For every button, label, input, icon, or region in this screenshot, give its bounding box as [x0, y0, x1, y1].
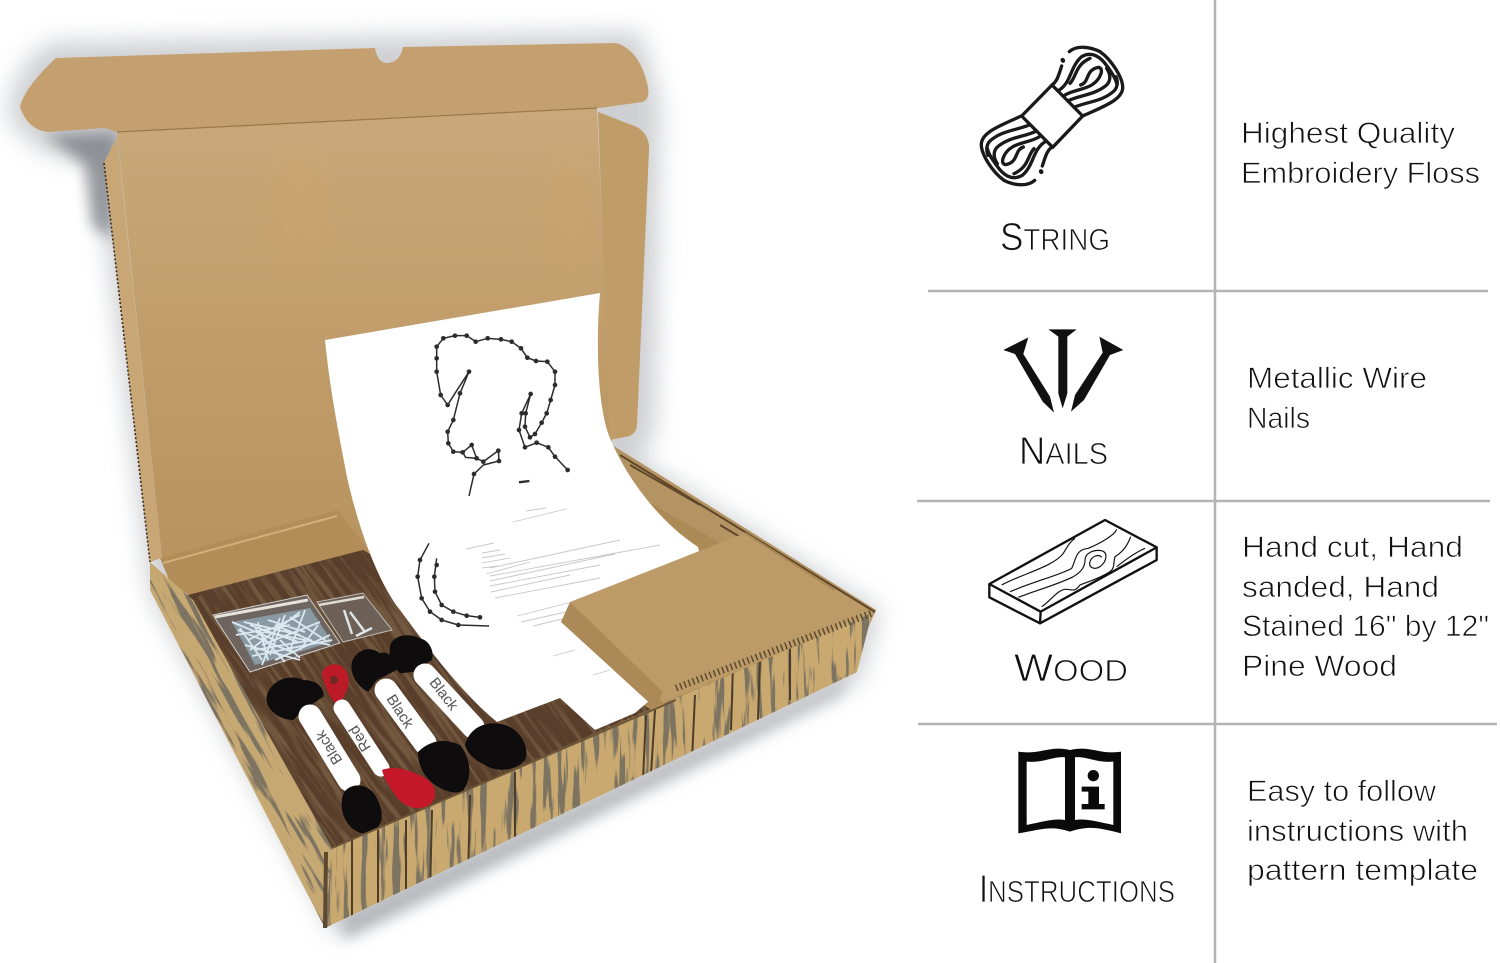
tube [310, 716, 349, 780]
row: nails [1003, 329, 1427, 473]
description: wood: Hand cut, Hand [1242, 531, 1463, 564]
box front wall with wood print [320, 600, 880, 935]
skein top [267, 677, 324, 720]
tube [425, 675, 473, 727]
lid top flap with notch [20, 43, 648, 132]
box corner edges [325, 613, 872, 928]
skein top [322, 664, 349, 705]
instruction text lines [466, 508, 660, 675]
nail bag large [213, 595, 340, 672]
description: instructions: Easy to follow [1247, 775, 1436, 808]
description: nails: Nails [1247, 402, 1310, 435]
lid fold line [117, 108, 597, 132]
box drop shadows [8, 32, 880, 940]
description: instructions: instructions with [1247, 815, 1468, 848]
lid right flap [598, 112, 649, 440]
skein top [351, 649, 397, 692]
description: wood [1242, 531, 1489, 683]
description: instructions [1247, 775, 1478, 887]
description: wood: sanded, Hand [1242, 571, 1439, 604]
skein top [390, 635, 433, 673]
paper instruction sheet with pattern [325, 293, 720, 730]
label: Black [426, 675, 462, 714]
description: wood: Pine Wood [1242, 650, 1397, 683]
lid glow patches [275, 160, 588, 260]
description: string: Embroidery Floss [1241, 157, 1480, 190]
thread skein: black, far [390, 635, 526, 770]
box left wall with wood print [150, 562, 332, 924]
string art pattern [415, 333, 570, 627]
icon: string skein [981, 47, 1123, 185]
description: nails [1247, 362, 1427, 435]
row: string [981, 47, 1480, 259]
skein bottom [342, 785, 382, 833]
product photo: opened kit box [8, 32, 890, 960]
wood board [188, 550, 651, 850]
tube [342, 708, 381, 768]
description: string [1241, 117, 1480, 190]
grid dividers [917, 0, 1497, 963]
label: Black [383, 692, 417, 732]
lid inner panel [117, 108, 640, 640]
thread skein: red [322, 664, 435, 808]
row: instructions [979, 749, 1478, 911]
thread skein: black, third [351, 649, 469, 793]
icon: information booklet [1018, 749, 1121, 833]
description: nails: Metallic Wire [1247, 362, 1427, 395]
heading: Instructions: INSTRUCTIONS [979, 868, 1175, 911]
heading: String: STRING [1000, 216, 1110, 259]
box interior behind contents [500, 445, 876, 720]
icon: wood plank [989, 520, 1157, 623]
label: Red [346, 722, 375, 755]
description: wood: Stained 16" by 12" [1242, 610, 1489, 643]
label: Black [312, 727, 346, 767]
hardware bag small [317, 593, 392, 642]
row: wood [989, 520, 1489, 690]
thread skein: black, near [267, 677, 382, 833]
tube [386, 690, 425, 743]
skein bottom [382, 768, 435, 808]
skein bottom [465, 723, 526, 770]
small cardboard box [561, 533, 872, 708]
heading: Nails: NAILS [1019, 430, 1108, 473]
description: string: Highest Quality [1241, 117, 1455, 150]
description: instructions: pattern template [1247, 854, 1478, 887]
lid lower fold strip [160, 510, 370, 598]
skein bottom [418, 741, 469, 793]
back box rim [613, 446, 876, 627]
icon: three nails [1003, 329, 1123, 413]
heading: Wood: WOOD [1014, 647, 1128, 690]
lid left corrugated side [104, 137, 162, 562]
